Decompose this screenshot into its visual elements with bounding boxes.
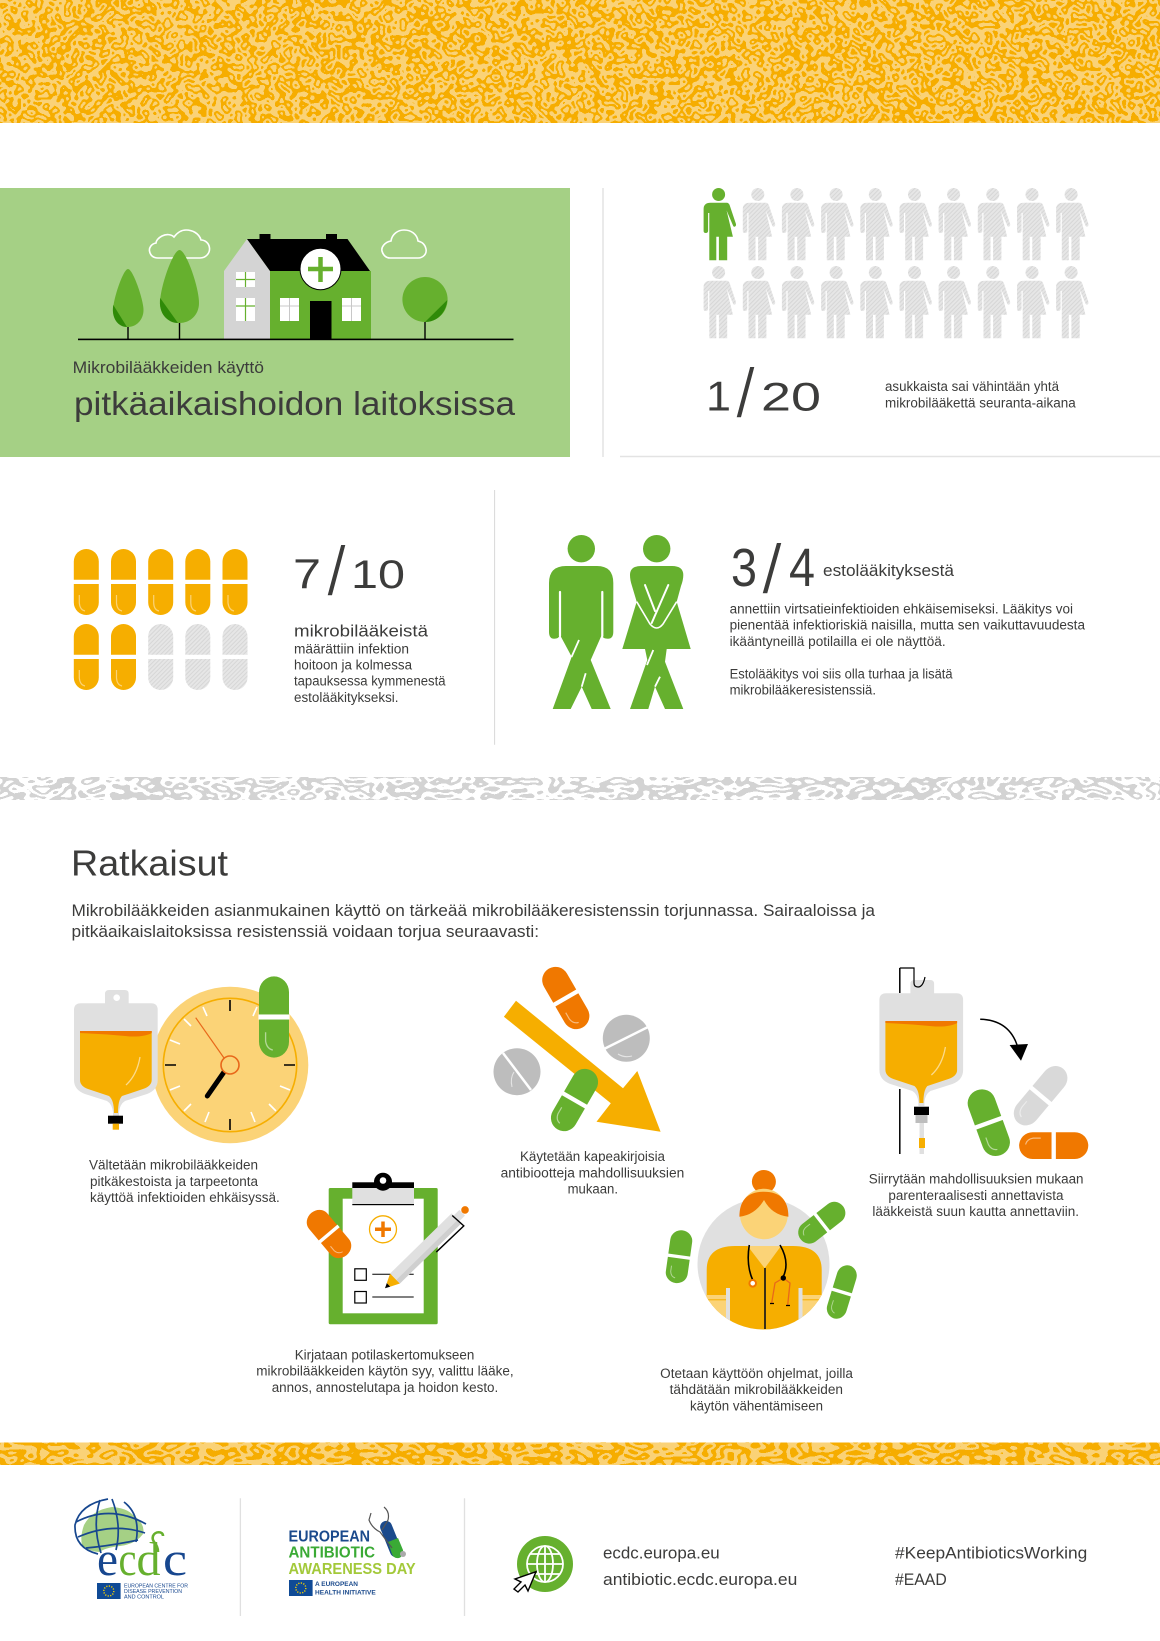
pictogram: 20 people (704, 188, 1089, 338)
icon: capsule and stethoscope (369, 1507, 406, 1559)
icon: trees (113, 250, 448, 339)
wordmark: c (118, 1533, 136, 1586)
caption: annos, annostelutapa ja hoidon kesto. (272, 1380, 498, 1395)
statistic 3/4 (731, 530, 955, 608)
description: mikrobilääkeistä (294, 622, 429, 641)
intro text: Mikrobilääkkeiden asianmukainen käyttö on tärkeää mikrobilääkeresistenssin torjunnassa. Sairaaloissa ja (72, 901, 876, 920)
statistic 1/20: / (736, 354, 756, 432)
wordmark (288, 1529, 416, 1578)
logo: European Antibiotic Awareness Day (288, 1507, 416, 1597)
EU flag (289, 1580, 313, 1596)
description (885, 379, 1076, 411)
sprout (153, 1532, 163, 1552)
statistic 1/20: 1 (706, 373, 731, 420)
hashtags: #KeepAntibioticsWorking (895, 1543, 1087, 1562)
logo: ECDC (75, 1499, 188, 1600)
caption: mukaan. (568, 1182, 618, 1197)
subtitle: Mikrobilääkkeiden käyttö (73, 358, 264, 377)
wordmark: AWARENESS DAY (288, 1561, 416, 1578)
description: ikääntyneillä potilailla ei ole näyttöä. (730, 634, 946, 649)
initiative label: HEALTH INITIATIVE (315, 1590, 376, 1597)
icon: man (549, 535, 613, 709)
web addresses: ecdc.europa.eu (603, 1543, 720, 1562)
EU flag (97, 1583, 121, 1599)
statistic 7/10: / (327, 532, 347, 610)
icon: web globe with cursor (514, 1536, 573, 1592)
panel: title with care home (0, 188, 570, 457)
globe (75, 1499, 146, 1554)
agency name: DISEASE PREVENTION (124, 1589, 182, 1595)
panel: 7/10 antibiotics (74, 532, 446, 705)
description: mikrobilääkeresistenssiä. (730, 683, 876, 698)
description: pienentää infektioriskiä naisilla, mutta sen vaikuttavuudesta (730, 617, 1085, 632)
description: asukkaista sai vähintään yhtä (885, 379, 1059, 394)
caption: Käytetään kapeakirjoisia (520, 1149, 665, 1164)
caption: Siirrytään mahdollisuuksien mukaan (869, 1171, 1084, 1186)
statistic 7/10: 10 (351, 553, 405, 597)
wordmark: c (163, 1533, 187, 1586)
statistic 7/10 (293, 532, 405, 610)
wordmark: ANTIBIOTIC (288, 1544, 375, 1561)
statistic 1/20 (706, 354, 821, 432)
panel: 1/20 residents (704, 188, 1089, 432)
statistic 3/4: 4 (789, 538, 815, 598)
initiative label (315, 1581, 376, 1597)
caption: Otetaan käyttöön ohjelmat, joilla (660, 1366, 853, 1381)
solution: narrow-spectrum antibiotics (494, 962, 684, 1197)
wordmark: EUROPEAN (288, 1529, 370, 1546)
icon: IV bag and oral pills (879, 968, 1088, 1160)
solution: stewardship programmes (660, 1170, 860, 1414)
description: mikrobilääkettä seuranta-aikana (885, 396, 1076, 411)
web addresses: antibiotic.ecdc.europa.eu (603, 1570, 797, 1589)
icon: woman (622, 535, 691, 709)
description: määrättiin infektion (294, 641, 409, 656)
agency name: EUROPEAN CENTRE FOR (124, 1584, 188, 1590)
icon: doctor with pills (664, 1170, 860, 1331)
description: Estolääkitys voi siis olla turhaa ja lisätä (730, 667, 953, 682)
caption (256, 1347, 514, 1395)
caption: parenteraalisesti annettavista (888, 1188, 1064, 1203)
solution: switch from parenteral to oral (869, 968, 1088, 1219)
footer dividers (240, 1498, 464, 1616)
wordmark: e (97, 1533, 118, 1586)
icon: clock with IV bag and pill (74, 976, 308, 1143)
divider line middle (494, 490, 496, 745)
caption: pitkäkestoista ja tarpeetonta (90, 1174, 258, 1189)
statistic 1/20: 20 (761, 376, 821, 420)
icon: clouds (149, 230, 426, 258)
panel: 3/4 prophylaxis (549, 530, 1085, 709)
caption: tähdätään mikrobilääkkeiden (670, 1382, 843, 1397)
intro text (72, 901, 876, 941)
description: hoitoon ja kolmessa (294, 657, 412, 672)
solution: document in patient records (256, 1173, 514, 1395)
pictogram: 10 capsules (74, 549, 248, 690)
icon: downward arrow with pills (494, 962, 661, 1136)
initiative label: A EUROPEAN (315, 1581, 358, 1588)
description: tapauksessa kymmenestä (294, 674, 446, 689)
icon: clipboard with pen and pill (302, 1173, 475, 1324)
caption: Vältetään mikrobilääkkeiden (89, 1157, 258, 1172)
caption (501, 1149, 684, 1197)
web addresses (603, 1543, 797, 1589)
statistic 3/4: / (762, 530, 783, 608)
wordmark (97, 1533, 187, 1586)
top pattern band (0, 0, 1160, 123)
caption: käytön vähentämiseen (690, 1399, 823, 1414)
icon: care home building (224, 234, 371, 339)
caption: käyttöä infektioiden ehkäisyssä. (90, 1190, 280, 1205)
caption: mikrobilääkkeiden käytön syy, valittu lääke, (256, 1363, 514, 1378)
description: estolääkitykseksi. (294, 690, 398, 705)
heading: solutions: Ratkaisut (71, 842, 228, 884)
caption (869, 1171, 1084, 1219)
wordmark: d (136, 1533, 160, 1586)
statistic 7/10: 7 (293, 550, 321, 597)
divider lines top (603, 188, 1160, 457)
description (730, 601, 1085, 698)
caption: lääkkeistä suun kautta annettaviin. (872, 1204, 1079, 1219)
grey pattern band (0, 777, 1160, 800)
title: pitkäaikaishoidon laitoksissa (74, 385, 516, 422)
solution: avoid prolonged use (74, 976, 308, 1205)
ground line (78, 339, 514, 340)
statistic 3/4: 3 (731, 538, 757, 598)
caption (89, 1157, 280, 1205)
agency name: AND CONTROL (124, 1594, 164, 1600)
caption (660, 1366, 853, 1414)
statistic 3/4: estolääkityksestä (823, 561, 955, 580)
description: annettiin virtsatieinfektioiden ehkäisemiseksi. Lääkitys voi (730, 601, 1073, 616)
hashtags (895, 1543, 1087, 1589)
agency name (124, 1584, 188, 1600)
intro text: pitkäaikaislaitoksissa resistenssiä voidaan torjua seuraavasti: (72, 922, 539, 941)
orange pattern band (0, 1443, 1160, 1465)
hashtags: #EAAD (895, 1570, 947, 1589)
description (294, 622, 446, 705)
caption: Kirjataan potilaskertomukseen (295, 1347, 474, 1362)
caption: antibiootteja mahdollisuuksien (501, 1166, 684, 1181)
